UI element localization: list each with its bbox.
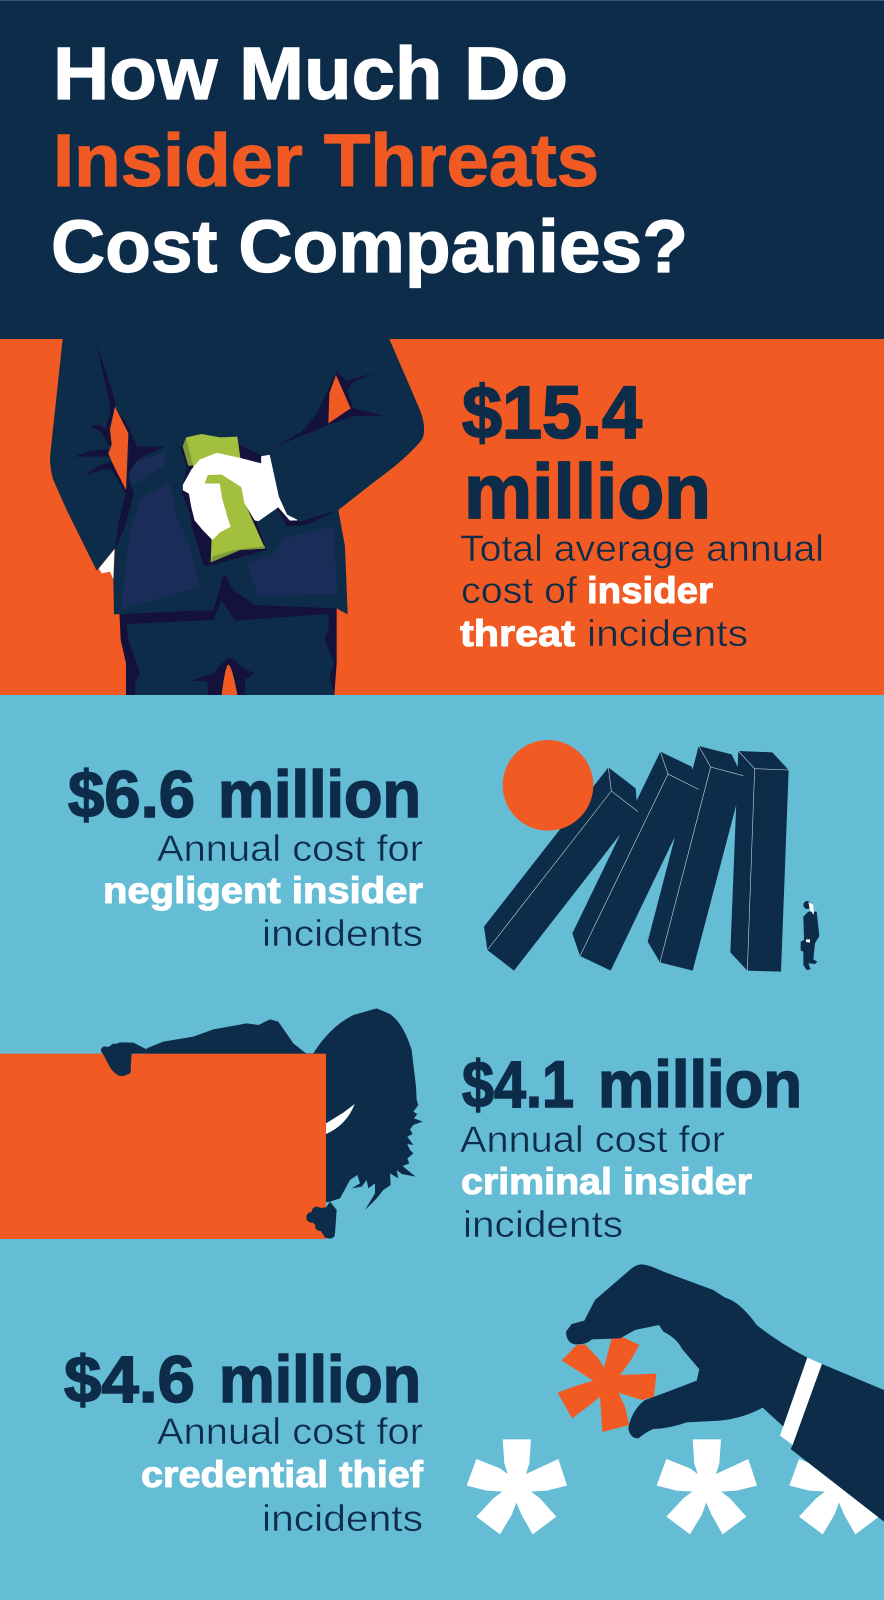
stat: 15.4 million [460,371,824,654]
icon: shirt cuff [780,1358,822,1445]
icon: jacket sleeve [791,1364,884,1522]
icon: white asterisk 2 [657,1439,757,1534]
orange block [0,1054,326,1239]
stat: 6.6 million: Annual cost for [157,828,423,869]
illustration: hand picking an asterisk [467,1264,884,1534]
arm and body shadows [74,343,384,550]
stat: 15.4 million: million [464,449,711,535]
panel: total cost [0,339,884,695]
icon: lower fingers [306,1202,337,1239]
stat: 15.4 million: insider [587,570,713,611]
stat: 4.6 million: $4.6 [64,1342,195,1416]
icon: orange ball [503,740,593,831]
icon: tiny businessman [801,901,819,970]
panel: credential thief [64,1264,884,1539]
stat: 6.6 million: negligent insider [103,870,423,911]
icon: white asterisk 1 [467,1439,567,1534]
stat: 15.4 million: threat [460,613,575,654]
stat: 4.1 million: million [598,1047,802,1121]
stat: 6.6 million [68,757,423,954]
title: Insider Threats [53,119,599,202]
icon: hand [566,1264,807,1438]
stat: 4.6 million: credential thief [141,1454,424,1495]
stat: 6.6 million: million [218,757,421,831]
stat: 6.6 million: incidents [262,913,423,954]
stat: 4.1 million [460,1047,802,1245]
title: Cost Companies? [51,205,688,288]
icon: banknote [183,434,265,562]
stat: 6.6 million: $6.6 [68,757,195,831]
panel: header [0,0,884,339]
illustration: falling dominoes [484,740,819,972]
icon: white gloved hand [183,453,297,539]
stat: 4.6 million [64,1342,424,1539]
icon: white asterisk 3 [789,1439,884,1534]
stat: 15.4 million: incidents [587,613,748,654]
icon: left shirt cuff [99,549,114,579]
icon: top fingers [101,1042,147,1076]
stat: 4.6 million: incidents [262,1498,423,1539]
icon: orange asterisk [558,1337,656,1432]
panel: negligent insider [68,740,819,972]
stat: 4.6 million: Annual cost for [157,1411,423,1452]
icon: white knife blade [326,1104,355,1134]
title [51,32,688,288]
stat: 4.1 million: Annual cost for [460,1119,725,1160]
panel: criminal insider [0,1008,802,1245]
stat: 15.4 million: $15.4 [462,371,642,454]
illustration: figure peeking from behind orange block [0,1008,423,1239]
stat: 4.1 million: criminal insider [461,1161,752,1202]
stat: 4.6 million: million [219,1342,421,1416]
stat: 15.4 million: cost of [461,570,578,611]
stat: 4.1 million: $4.1 [462,1047,574,1121]
title: How Much Do [53,32,568,115]
stat: 4.1 million: incidents [463,1204,623,1245]
illustration: businessman hiding money behind back [50,339,424,695]
stat: 15.4 million: Total average annual [460,528,824,569]
